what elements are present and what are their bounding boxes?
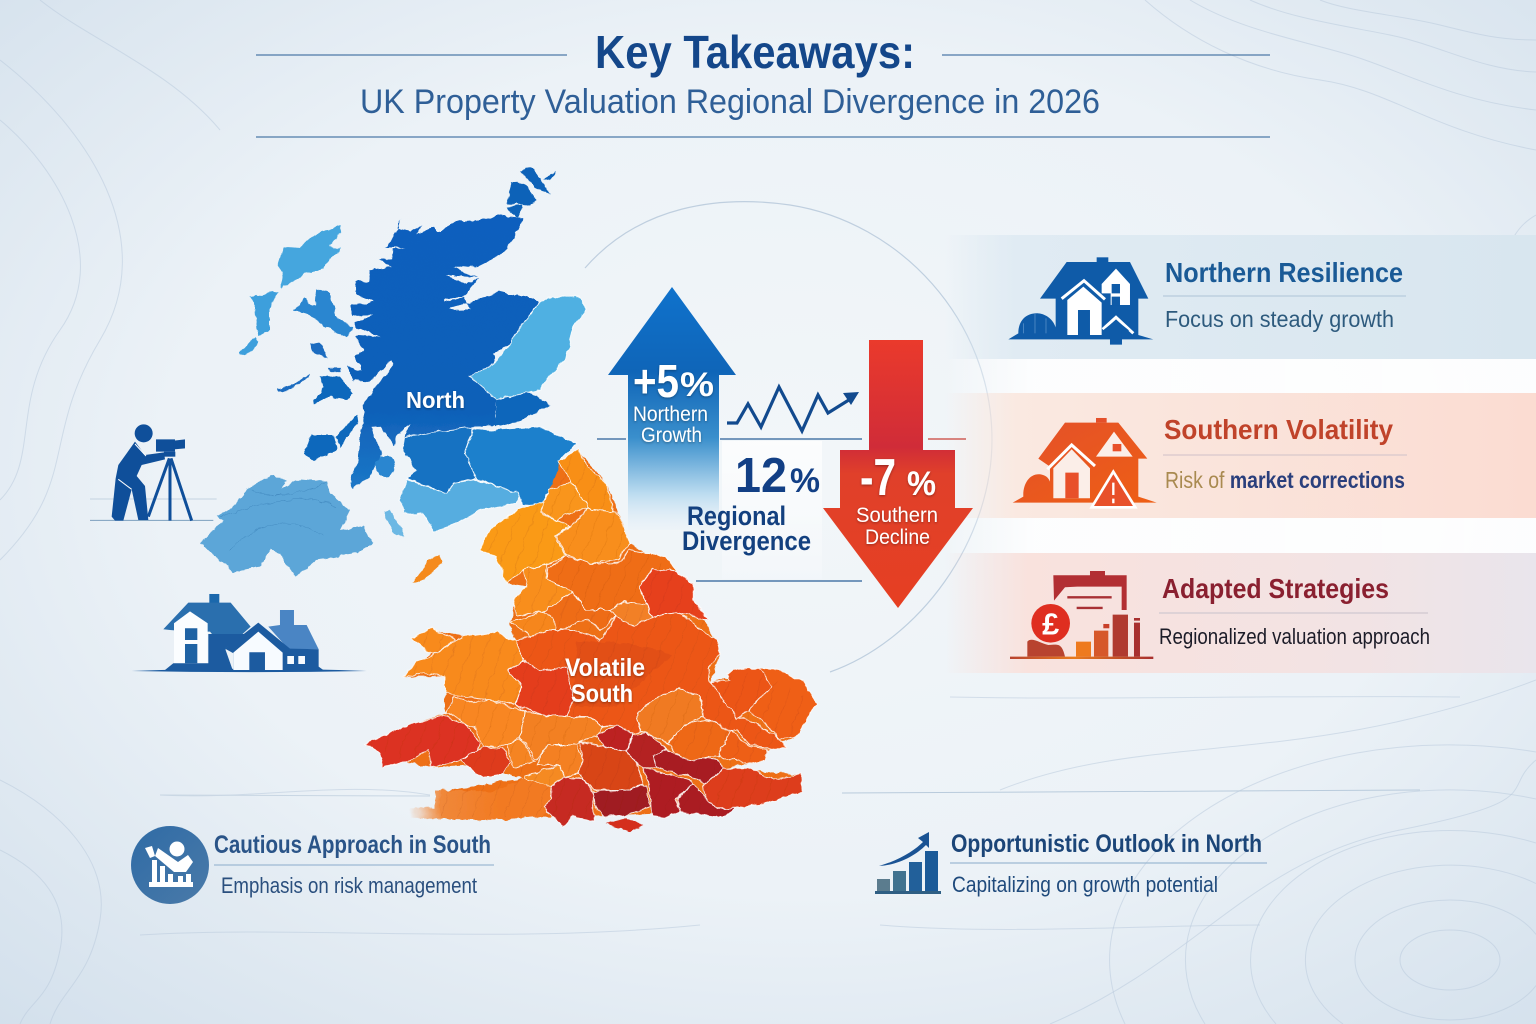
- region: Yorkshire: [547, 550, 677, 610]
- icon: clipboard, pound coin and bars: [1010, 571, 1153, 659]
- title block: [256, 26, 1270, 137]
- region: Fife: [495, 393, 550, 427]
- panel: divergence backdrop: [722, 441, 822, 579]
- label: southern decline: Decline: [865, 526, 930, 549]
- region: Borders: [465, 427, 577, 507]
- map: England and Wales: [365, 448, 817, 832]
- region: Midlands and East: [508, 613, 787, 748]
- region: Berkshire: [578, 742, 643, 790]
- region: Central belt: [403, 427, 477, 493]
- region: Buckinghamshire: [597, 725, 633, 752]
- arrow: southern decline: [823, 340, 973, 608]
- region: Lancashire: [513, 565, 573, 615]
- chart: zigzag trend line: [727, 387, 859, 431]
- islands: Islay and Jura: [303, 415, 358, 460]
- label: northern growth: Growth: [641, 424, 702, 447]
- map label: Volatile South: South: [571, 680, 633, 708]
- arrow: northern growth: [608, 287, 736, 530]
- region: Devon fade: [410, 778, 552, 820]
- centre circle outline: [585, 202, 992, 672]
- islands: small isles: [277, 342, 342, 391]
- description: Regionalized valuation approach: [1159, 624, 1430, 649]
- label: regional divergence: Regional: [687, 501, 786, 531]
- region: Somerset: [525, 765, 565, 787]
- island: Arran: [376, 455, 395, 477]
- region: Wiltshire: [537, 745, 583, 777]
- island: Isle of Man north: [383, 509, 406, 538]
- region: Anglesey: [412, 628, 455, 653]
- region: Aberdeenshire: [470, 297, 587, 399]
- island: Isle of Man: [413, 553, 442, 583]
- description: Risk of market corrections: [1165, 467, 1405, 493]
- region: Greater London: [653, 748, 725, 783]
- heading: Northern Resilience: [1165, 257, 1403, 288]
- stat: +5%: [633, 355, 714, 407]
- stat: 12%: %: [790, 462, 820, 500]
- region: Dales: [557, 508, 630, 563]
- heading: Opportunistic Outlook in North: [951, 830, 1262, 858]
- region: Cumbria: [480, 502, 570, 583]
- map label: Volatile South: [565, 654, 645, 708]
- heading: Cautious Approach in South: [214, 831, 491, 859]
- region: Cheshire: [510, 612, 560, 637]
- region: Wales: [402, 632, 523, 705]
- icon: northern house: [1008, 257, 1153, 345]
- region: Oxfordshire: [520, 712, 603, 760]
- stat: -7%: %: [907, 465, 936, 503]
- region: Highlands: [347, 215, 541, 493]
- region: Sussex: [677, 785, 737, 818]
- region: South Wales: [445, 697, 525, 747]
- region: Dumfries: [400, 480, 518, 532]
- region: Isle of Wight: [607, 818, 643, 832]
- island: Lewis: [278, 225, 342, 290]
- region: Suffolk: [750, 668, 817, 740]
- description: Emphasis on risk management: [221, 873, 477, 898]
- island: Uists: [240, 292, 277, 355]
- label: southern decline: [856, 504, 938, 549]
- region: Humber: [640, 568, 709, 620]
- UK map: [200, 168, 817, 832]
- title: Key Takeaways:: [595, 26, 915, 78]
- contour lines: Highlands: [347, 215, 541, 493]
- subtitle: UK Property Valuation Regional Divergence in 2026: [360, 83, 1100, 121]
- region: Durham: [540, 482, 588, 520]
- stat: -7%: [860, 449, 936, 507]
- region: Essex: [718, 730, 768, 763]
- description: Focus on steady growth: [1165, 306, 1394, 332]
- icon: clipboard, pound coin and bars: £: [1042, 607, 1059, 641]
- region: North East: [558, 448, 613, 512]
- panel: southern volatility: [945, 393, 1536, 518]
- heading: Southern Volatility: [1164, 414, 1393, 445]
- panel: cautious approach in south: [131, 826, 494, 904]
- stat: +5%: +5: [633, 355, 679, 407]
- panel: white separators: [945, 359, 1536, 553]
- region: Gower: [460, 747, 510, 778]
- panel: northern resilience: [945, 235, 1536, 359]
- region: Hertfordshire: [627, 733, 667, 768]
- map label: Volatile South: Volatile: [565, 654, 645, 682]
- region: Volatile band: [573, 641, 672, 707]
- region: Severn: [507, 738, 535, 768]
- stat: 12%: [735, 449, 820, 503]
- label: northern growth: Northern: [633, 403, 708, 426]
- panel: adapted strategies: [945, 553, 1536, 673]
- contour lines: England: [367, 450, 817, 817]
- islands: Orkney and Shetland: [507, 168, 555, 218]
- panel: right-hand takeaways: [945, 235, 1536, 673]
- island: Mull: [313, 377, 353, 405]
- region: Kent: [703, 768, 802, 808]
- base silhouette: [367, 450, 817, 817]
- region: Hampshire: [593, 785, 650, 817]
- icon: southern house with warning: [1013, 418, 1157, 507]
- central statistics: [597, 287, 973, 608]
- stat: 12%: 12: [735, 449, 787, 503]
- icon: houses: [132, 594, 367, 672]
- heading: Adapted Strategies: [1162, 573, 1389, 604]
- map: Scotland and Northern Ireland: [200, 168, 587, 577]
- label: regional divergence: [682, 501, 811, 556]
- region: Norfolk: [710, 668, 773, 718]
- region: Derbyshire: [610, 602, 653, 627]
- stat: +5%: %: [680, 366, 714, 404]
- icon: surveyor with tripod: [90, 424, 217, 521]
- label: northern growth: [633, 403, 708, 447]
- region: Bedfordshire: [637, 688, 703, 743]
- label: regional divergence: Divergence: [682, 526, 811, 556]
- panel: opportunistic outlook in north: [875, 830, 1267, 897]
- region: Cambridgeshire: [667, 720, 730, 760]
- map label: North: North: [406, 387, 465, 413]
- region: Dorset: [543, 777, 595, 827]
- description: Capitalizing on growth potential: [952, 872, 1218, 897]
- region: West Midlands: [508, 660, 573, 717]
- icon: risk management badge: [131, 826, 209, 904]
- lines: Northern Ireland: [220, 482, 337, 550]
- label: southern decline: Southern: [856, 504, 938, 527]
- stat: -7%: -7: [860, 449, 896, 507]
- icon: growth bars and arrow: [875, 832, 941, 894]
- region: Pembroke: [365, 715, 480, 768]
- island: Skye: [293, 288, 353, 337]
- region: Surrey: [643, 768, 693, 818]
- region: Peak: [543, 592, 617, 635]
- region: Northern Ireland: [200, 475, 373, 577]
